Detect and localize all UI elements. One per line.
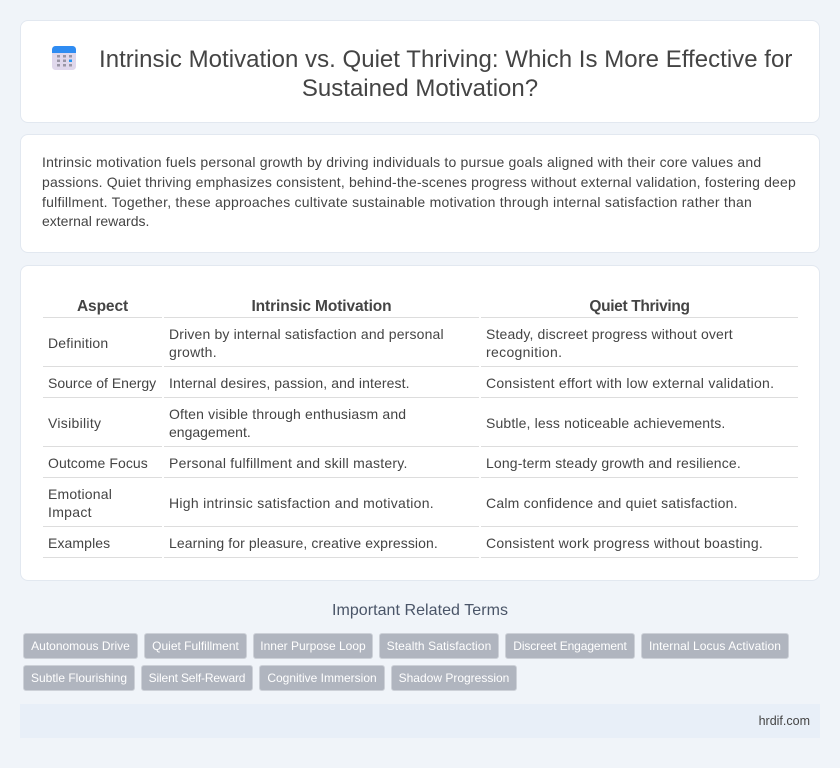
intro paragraph: fulfillment. Together, these approaches cultivate sustainable motivation through internal satisfaction rather than — [42, 194, 752, 210]
comparison table: Consistent effort with low external validation. — [486, 375, 774, 391]
tag: Discreet Engagement — [513, 639, 627, 653]
tag: Autonomous Drive — [31, 639, 130, 653]
tag — [23, 665, 135, 691]
title: Sustained Motivation? — [302, 75, 538, 102]
tag: Quiet Fulfillment — [152, 639, 239, 653]
intro paragraph: Intrinsic motivation fuels personal growth by driving individuals to pursue goals aligned with their core values and — [42, 154, 761, 170]
comparison table: High intrinsic satisfaction and motivation. — [169, 495, 434, 511]
title — [99, 46, 792, 102]
comparison table: Calm confidence and quiet satisfaction. — [486, 495, 738, 511]
comparison table: Personal fulfillment and skill mastery. — [169, 455, 408, 471]
row: Examples: Examples — [48, 535, 110, 551]
comparison table — [43, 298, 798, 558]
tag — [505, 633, 635, 659]
comparison table: Steady, discreet progress without overt — [486, 326, 733, 342]
tag: Stealth Satisfaction — [387, 639, 491, 653]
icon: calendar — [52, 46, 76, 70]
footer text: hrdif.com: hrdif.com — [759, 714, 810, 728]
comparison table: Consistent work progress without boasting. — [486, 535, 763, 551]
tag — [144, 633, 247, 659]
comparison table: Subtle, less noticeable achievements. — [486, 415, 725, 431]
tag: Inner Purpose Loop — [260, 639, 366, 653]
panel: intro card — [20, 134, 820, 253]
tag — [253, 633, 373, 659]
tag: Internal Locus Activation — [649, 639, 781, 653]
comparison table: Long-term steady growth and resilience. — [486, 455, 741, 471]
comparison table: engagement. — [169, 424, 251, 440]
comparison table: growth. — [169, 344, 217, 360]
tag: Silent Self-Reward — [149, 671, 245, 685]
row: Emotional Impact — [48, 486, 112, 520]
tag — [641, 633, 789, 659]
tag — [259, 665, 385, 691]
panel: title card — [20, 20, 820, 123]
row: Outcome Focus: Outcome Focus — [48, 455, 148, 471]
row: Visibility: Visibility — [48, 415, 101, 431]
footer bar — [20, 704, 820, 738]
tag: Shadow Progression — [399, 671, 509, 685]
comparison table: Internal desires, passion, and interest. — [169, 375, 410, 391]
tag: Subtle Flourishing — [31, 671, 127, 685]
tag — [391, 665, 517, 691]
intro paragraph: passions. Quiet thriving emphasizes consistent, behind-the-scenes progress without external validation, fostering deep — [42, 174, 796, 190]
row: Definition: Definition — [48, 335, 108, 351]
intro paragraph — [42, 154, 796, 229]
panel: comparison table card — [20, 265, 820, 581]
heading: Important Related Terms: Important Related Terms — [332, 602, 508, 619]
header: Quiet Thriving: Quiet Thriving — [589, 298, 690, 315]
tag: Cognitive Immersion — [267, 671, 377, 685]
tag — [141, 665, 253, 691]
header: Intrinsic Motivation: Intrinsic Motivation — [251, 298, 392, 315]
intro paragraph: external rewards. — [42, 213, 149, 229]
tag — [23, 633, 138, 659]
title: Intrinsic Motivation vs. Quiet Thriving: Which Is More Effective for — [99, 46, 792, 73]
comparison table: Driven by internal satisfaction and personal — [169, 326, 444, 342]
header: Aspect: Aspect — [77, 298, 128, 315]
row: Source of Energy: Source of Energy — [48, 375, 156, 391]
related terms tags — [23, 633, 789, 691]
comparison table: recognition. — [486, 344, 562, 360]
row: Emotional Impact: Emotional — [48, 486, 112, 502]
tag — [379, 633, 499, 659]
row: Emotional Impact: Impact — [48, 504, 92, 520]
comparison table: Often visible through enthusiasm and — [169, 406, 406, 422]
comparison table: Learning for pleasure, creative expression. — [169, 535, 438, 551]
